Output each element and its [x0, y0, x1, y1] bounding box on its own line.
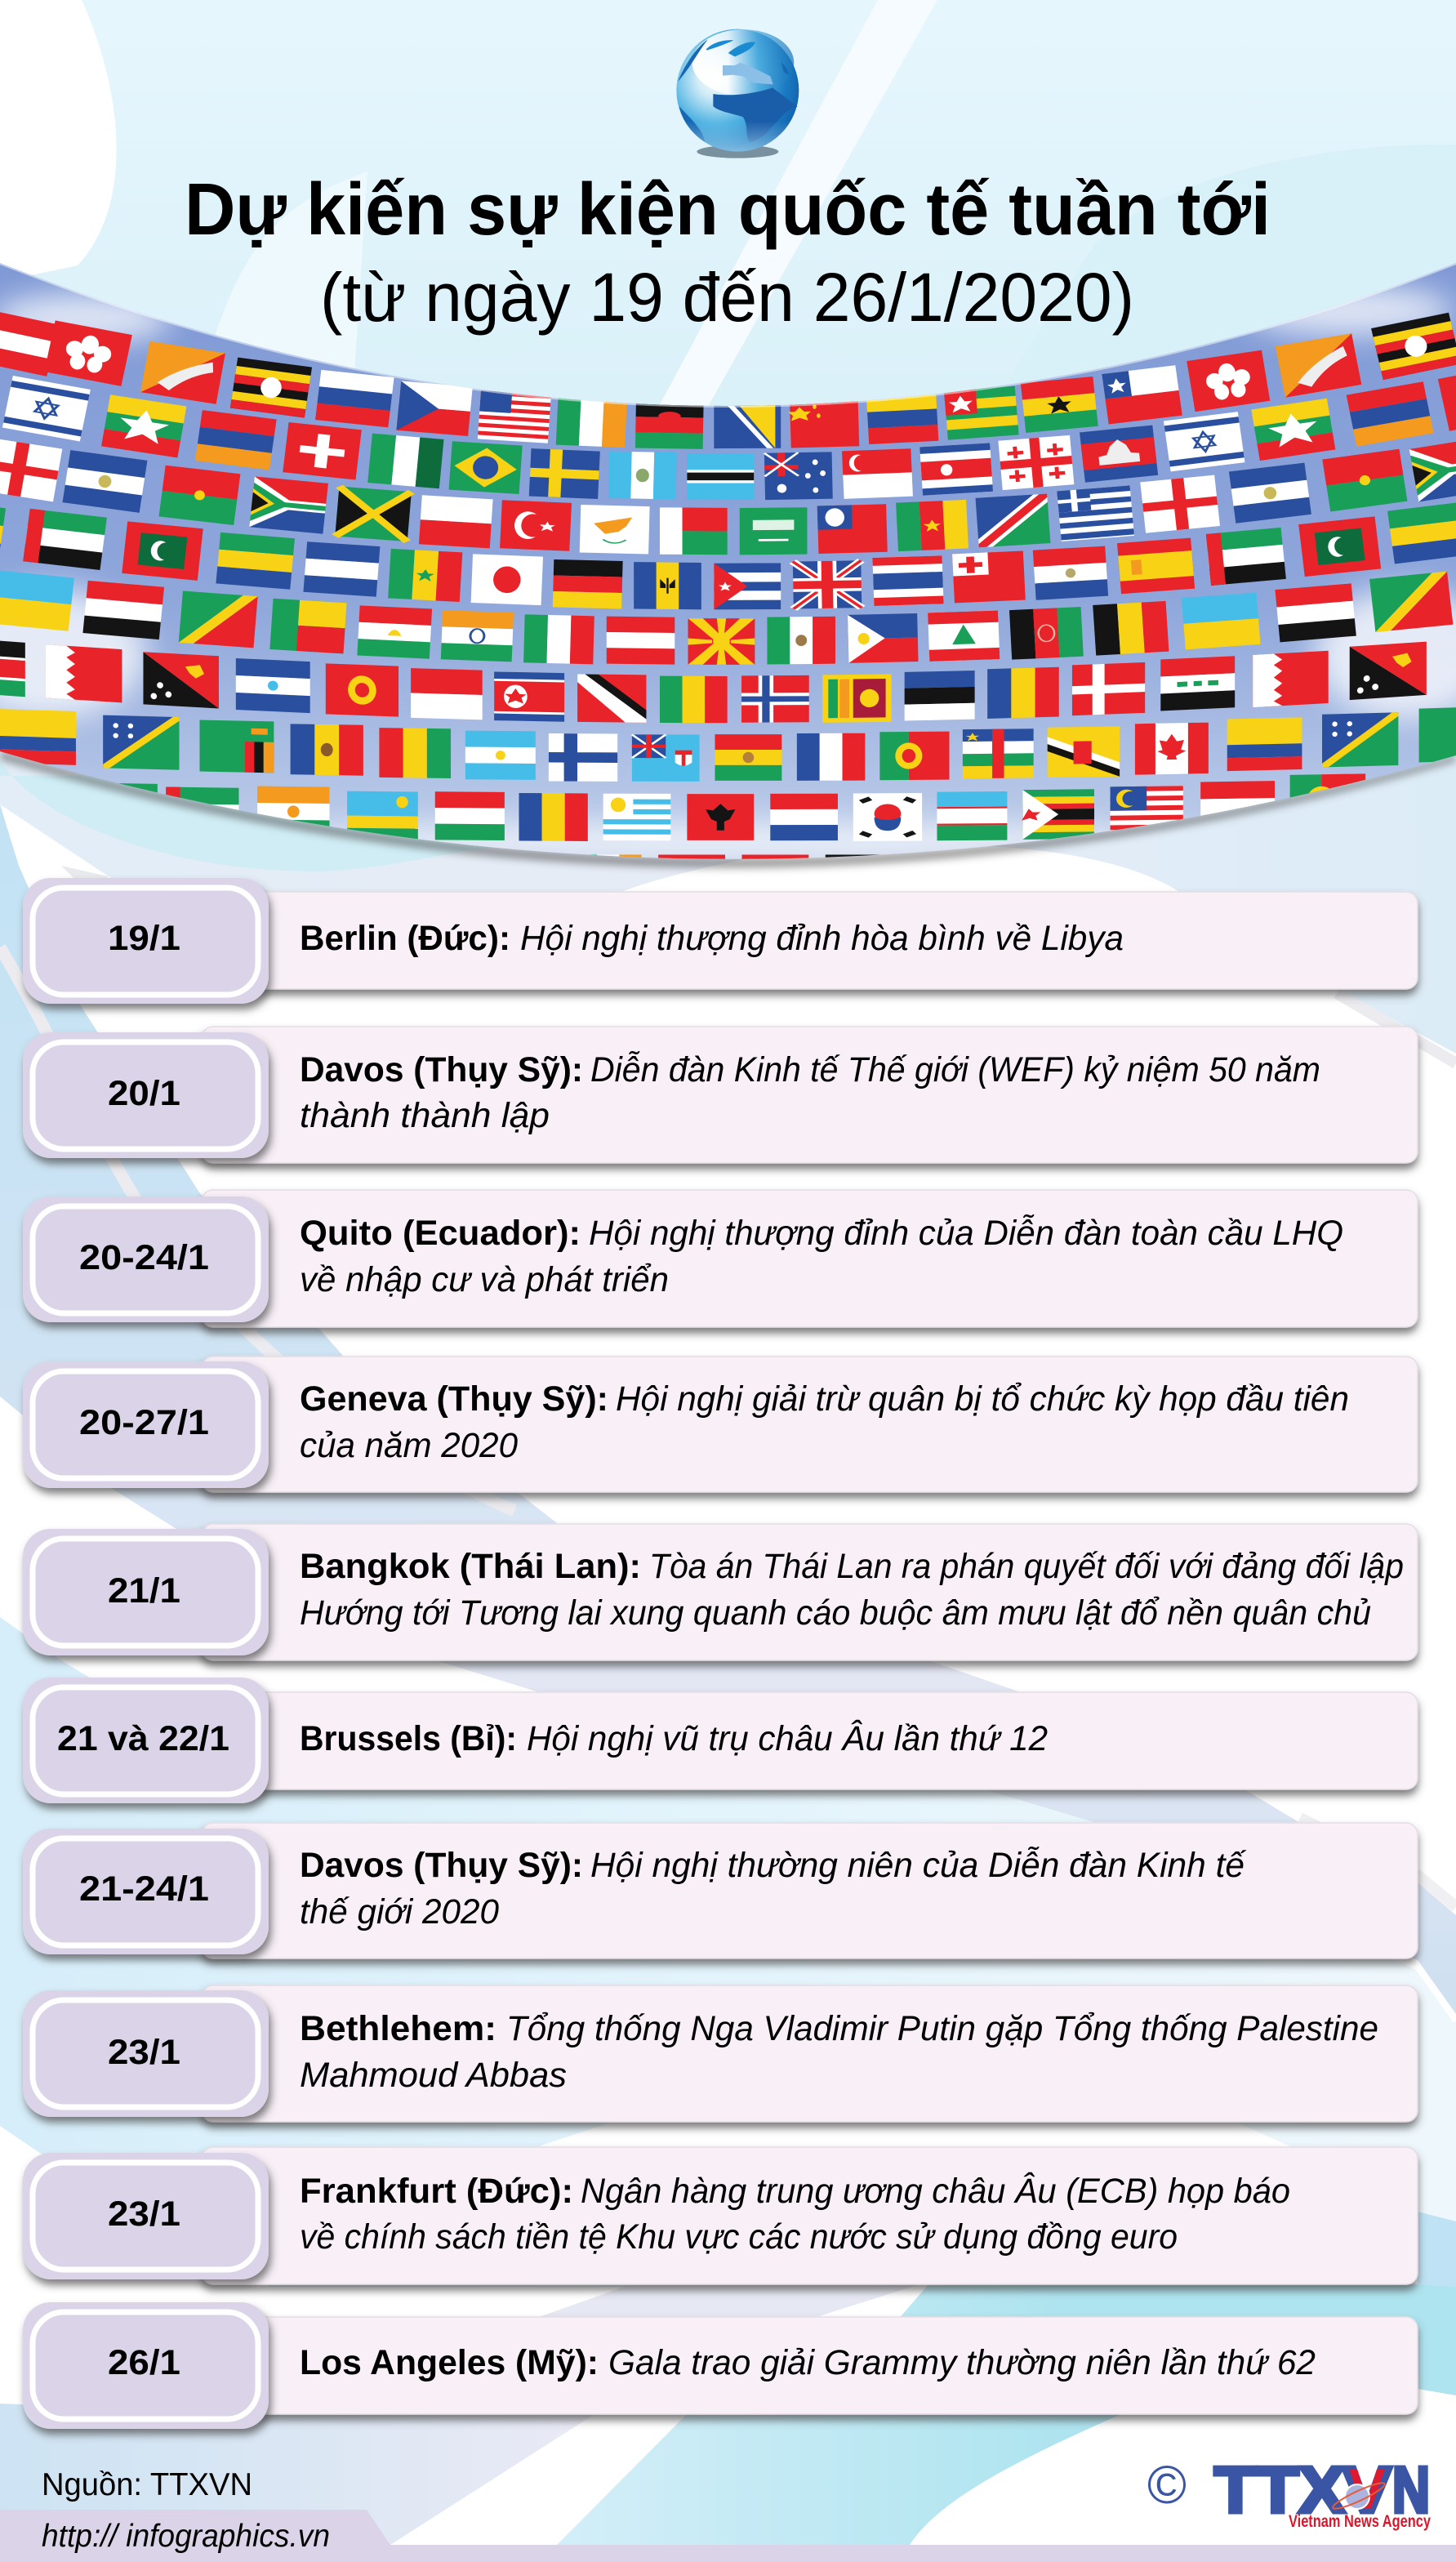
- event place: Bangkok (Thái Lan):: [300, 1547, 641, 1586]
- footer bar: [0, 2510, 1456, 2562]
- event description line 2: về nhập cư và phát triển: [300, 1260, 669, 1299]
- TTXVN logo: TTX: [1214, 2453, 1345, 2526]
- date badge: [23, 1529, 269, 1655]
- event card: [202, 2317, 1418, 2414]
- date badge: [23, 1829, 269, 1954]
- icon: globe: [676, 29, 799, 158]
- subtitle: (từ ngày 19 đến 26/1/2020): [320, 259, 1134, 336]
- date badge: [23, 2302, 269, 2429]
- flag row 8: [84, 773, 1365, 841]
- event row: 19/1: [23, 878, 1418, 1004]
- event place: Davos (Thụy Sỹ):: [300, 1050, 583, 1089]
- event description line 2: Hướng tới Tương lai xung quanh cáo buộc âm mưu lật đổ nền quân chủ: [300, 1593, 1371, 1633]
- date: 26/1: [108, 2343, 180, 2382]
- TTXVN logo: V: [1342, 2453, 1391, 2526]
- flag row 1: [0, 308, 1456, 449]
- event row: 21 và 22/1: [23, 1678, 1418, 1803]
- event row: 21/1: [23, 1524, 1418, 1660]
- event description: Hội nghị giải trừ quân bị tổ chức kỳ họp đầu tiên: [616, 1379, 1349, 1419]
- flag row 9: [589, 854, 880, 859]
- date badge: [23, 1196, 269, 1322]
- event description: Tòa án Thái Lan ra phán quyết đối với đảng đối lập: [649, 1547, 1404, 1586]
- date: 23/1: [108, 2194, 180, 2234]
- event card: [202, 1190, 1418, 1327]
- event row: 23/1 Bethlehem: [23, 1985, 1418, 2122]
- date: 20-27/1: [79, 1403, 209, 1442]
- event description line 2: của năm 2020: [300, 1426, 518, 1465]
- event row: 23/1 Frankfurt: [23, 2147, 1418, 2284]
- date badge: [23, 1032, 269, 1158]
- date: 23/1: [108, 2033, 180, 2072]
- flag row 2: [2, 364, 1456, 500]
- event row: 20/1: [23, 1027, 1418, 1163]
- event description line 2: thế giới 2020: [300, 1892, 499, 1932]
- event row: 20-24/1: [23, 1190, 1418, 1327]
- flag row 5: [0, 570, 1453, 665]
- event card: [202, 2147, 1418, 2284]
- date badge: [23, 1361, 269, 1488]
- event card: [202, 1823, 1418, 1958]
- event place: Frankfurt (Đức):: [300, 2172, 573, 2211]
- event place: Bethlehem:: [300, 2009, 496, 2048]
- flag row 6: [0, 637, 1427, 723]
- event card: [202, 1985, 1418, 2122]
- date: 21-24/1: [79, 1869, 209, 1909]
- event card: [202, 1027, 1418, 1163]
- event card: [202, 892, 1418, 989]
- TTXVN logo: V: [1349, 2457, 1385, 2521]
- event description: Ngân hàng trung ương châu Âu (ECB) họp báo: [581, 2172, 1290, 2211]
- flag banner: [0, 245, 1456, 901]
- event row: 20-27/1: [23, 1357, 1418, 1492]
- event description: Diễn đàn Kinh tế Thế giới (WEF) kỷ niệm 50 năm: [590, 1050, 1320, 1089]
- event description: Hội nghị thượng đỉnh của Diễn đàn toàn cầu LHQ: [589, 1214, 1343, 1253]
- event place: Brussels (Bỉ):: [300, 1719, 517, 1758]
- date: 20/1: [108, 1074, 180, 1113]
- event card: [202, 1524, 1418, 1660]
- event description: Gala trao giải Grammy thường niên lần thứ 62: [608, 2343, 1316, 2382]
- event description line 2: về chính sách tiền tệ Khu vực các nước sử dụng đồng euro: [300, 2217, 1178, 2257]
- flag row 3: [0, 437, 1456, 555]
- date: 19/1: [108, 919, 180, 958]
- date: 20-24/1: [79, 1238, 209, 1277]
- event place: Geneva (Thụy Sỹ):: [300, 1379, 608, 1419]
- event place: Davos (Thụy Sỹ):: [300, 1846, 583, 1885]
- copyright symbol: ©: [1147, 2454, 1187, 2515]
- event card: [202, 1692, 1418, 1789]
- source text: Nguồn: TTXVN: [42, 2467, 252, 2502]
- TTXVN logo: N: [1392, 2453, 1430, 2526]
- event place: Berlin (Đức):: [300, 919, 510, 958]
- title: Dự kiến sự kiện quốc tế tuần tới: [185, 169, 1271, 251]
- TTXVN logo: [1214, 2453, 1431, 2531]
- flag row 7: [0, 706, 1456, 782]
- event row: 26/1: [23, 2302, 1418, 2429]
- event place: Quito (Ecuador):: [300, 1214, 581, 1253]
- event description line 2: Mahmoud Abbas: [300, 2056, 567, 2095]
- date badge: [23, 878, 269, 1004]
- date: 21 và 22/1: [57, 1719, 229, 1758]
- date badge: [23, 2153, 269, 2279]
- date badge: [23, 1678, 269, 1803]
- event description: Hội nghị thường niên của Diễn đàn Kinh tế: [590, 1846, 1247, 1885]
- date badge: [23, 1990, 269, 2117]
- banner shadow: [0, 751, 1456, 868]
- event card: [202, 1357, 1418, 1492]
- event description: Hội nghị thượng đỉnh hòa bình về Libya: [520, 919, 1124, 958]
- event description line 2: thành thành lập: [300, 1096, 550, 1135]
- website text: http:// infographics.vn: [42, 2519, 330, 2554]
- event description: Hội nghị vũ trụ châu Âu lần thứ 12: [527, 1719, 1048, 1758]
- event place: Los Angeles (Mỹ):: [300, 2343, 599, 2382]
- flag row 4: [0, 498, 1456, 609]
- date: 21/1: [108, 1571, 180, 1611]
- event row: 21-24/1: [23, 1823, 1418, 1958]
- event description: Tổng thống Nga Vladimir Putin gặp Tổng thống Palestine: [506, 2009, 1378, 2048]
